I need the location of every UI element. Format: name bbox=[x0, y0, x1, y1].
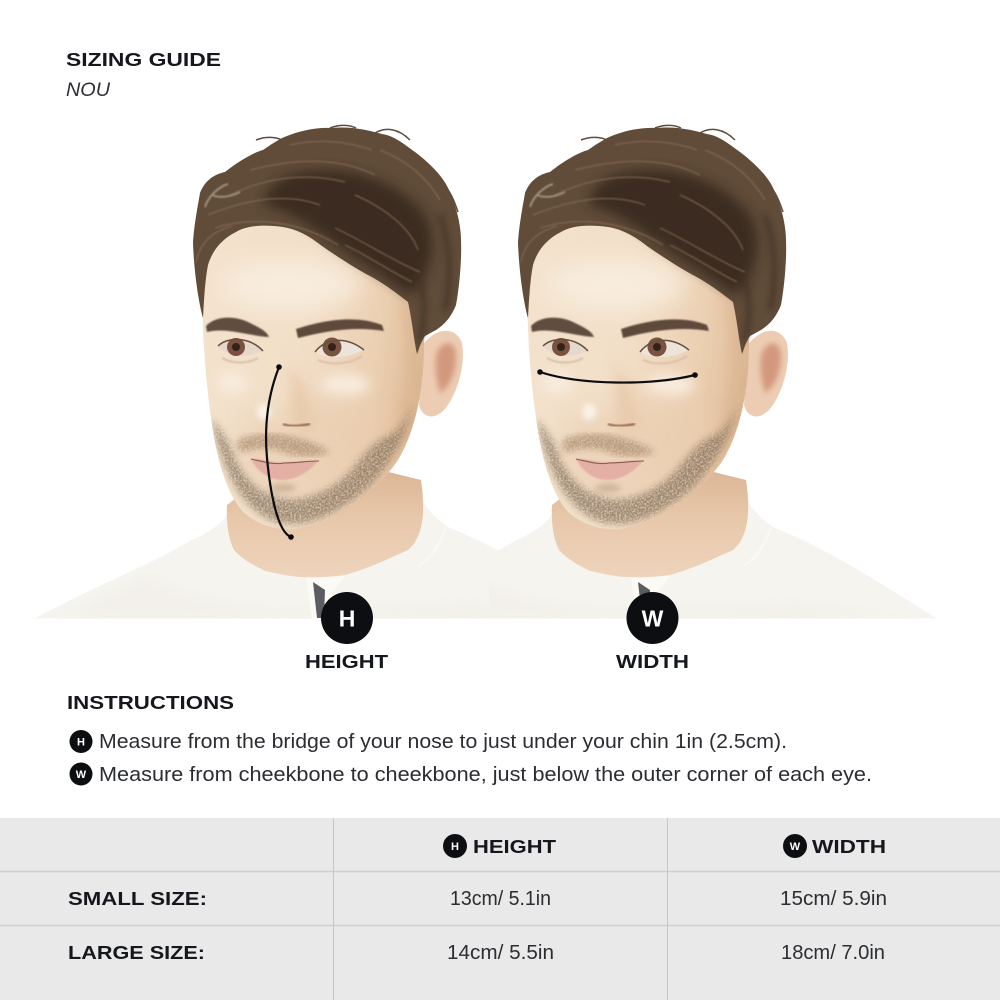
instructions bbox=[67, 692, 872, 786]
instruction: height: Measure from the bridge of your nose to just under your chin 1in (2.5cm). bbox=[99, 731, 787, 753]
measurement line: width bbox=[537, 369, 698, 383]
row: large size: 14cm/ 5.5in bbox=[447, 942, 554, 964]
column header: height: H bbox=[451, 841, 459, 853]
column header: height: HEIGHT bbox=[473, 836, 557, 857]
column header: width: W bbox=[790, 841, 801, 853]
label: width: WIDTH bbox=[616, 651, 689, 672]
measurement line: height bbox=[266, 364, 294, 540]
row: small size: 13cm/ 5.1in bbox=[450, 888, 551, 910]
instruction: width: Measure from cheekbone to cheekbone, just below the outer corner of each eye. bbox=[99, 764, 872, 786]
row: large size: LARGE SIZE: bbox=[68, 942, 205, 963]
person: width measurement bbox=[498, 124, 936, 618]
size table bbox=[0, 818, 1000, 1000]
person: height measurement bbox=[36, 124, 498, 618]
badge: width: W bbox=[642, 606, 664, 632]
badge: height: H bbox=[339, 606, 355, 632]
row: large size: 18cm/ 7.0in bbox=[781, 942, 885, 964]
title bbox=[66, 50, 221, 101]
title: SIZING GUIDE bbox=[66, 50, 221, 70]
row: large size bbox=[68, 942, 885, 964]
instruction: width: W bbox=[76, 769, 87, 781]
instructions heading: INSTRUCTIONS bbox=[67, 692, 234, 713]
subtitle: NOU bbox=[66, 80, 110, 101]
row: small size: 15cm/ 5.9in bbox=[780, 888, 887, 910]
badge: width bbox=[616, 592, 689, 672]
column header: height bbox=[443, 834, 557, 858]
badge: height bbox=[305, 592, 389, 672]
column header: width: WIDTH bbox=[812, 836, 886, 857]
row: small size bbox=[68, 888, 887, 910]
label: height: HEIGHT bbox=[305, 651, 389, 672]
column header: width bbox=[783, 834, 886, 858]
instruction: height: H bbox=[77, 736, 85, 748]
row: small size: SMALL SIZE: bbox=[68, 888, 207, 909]
